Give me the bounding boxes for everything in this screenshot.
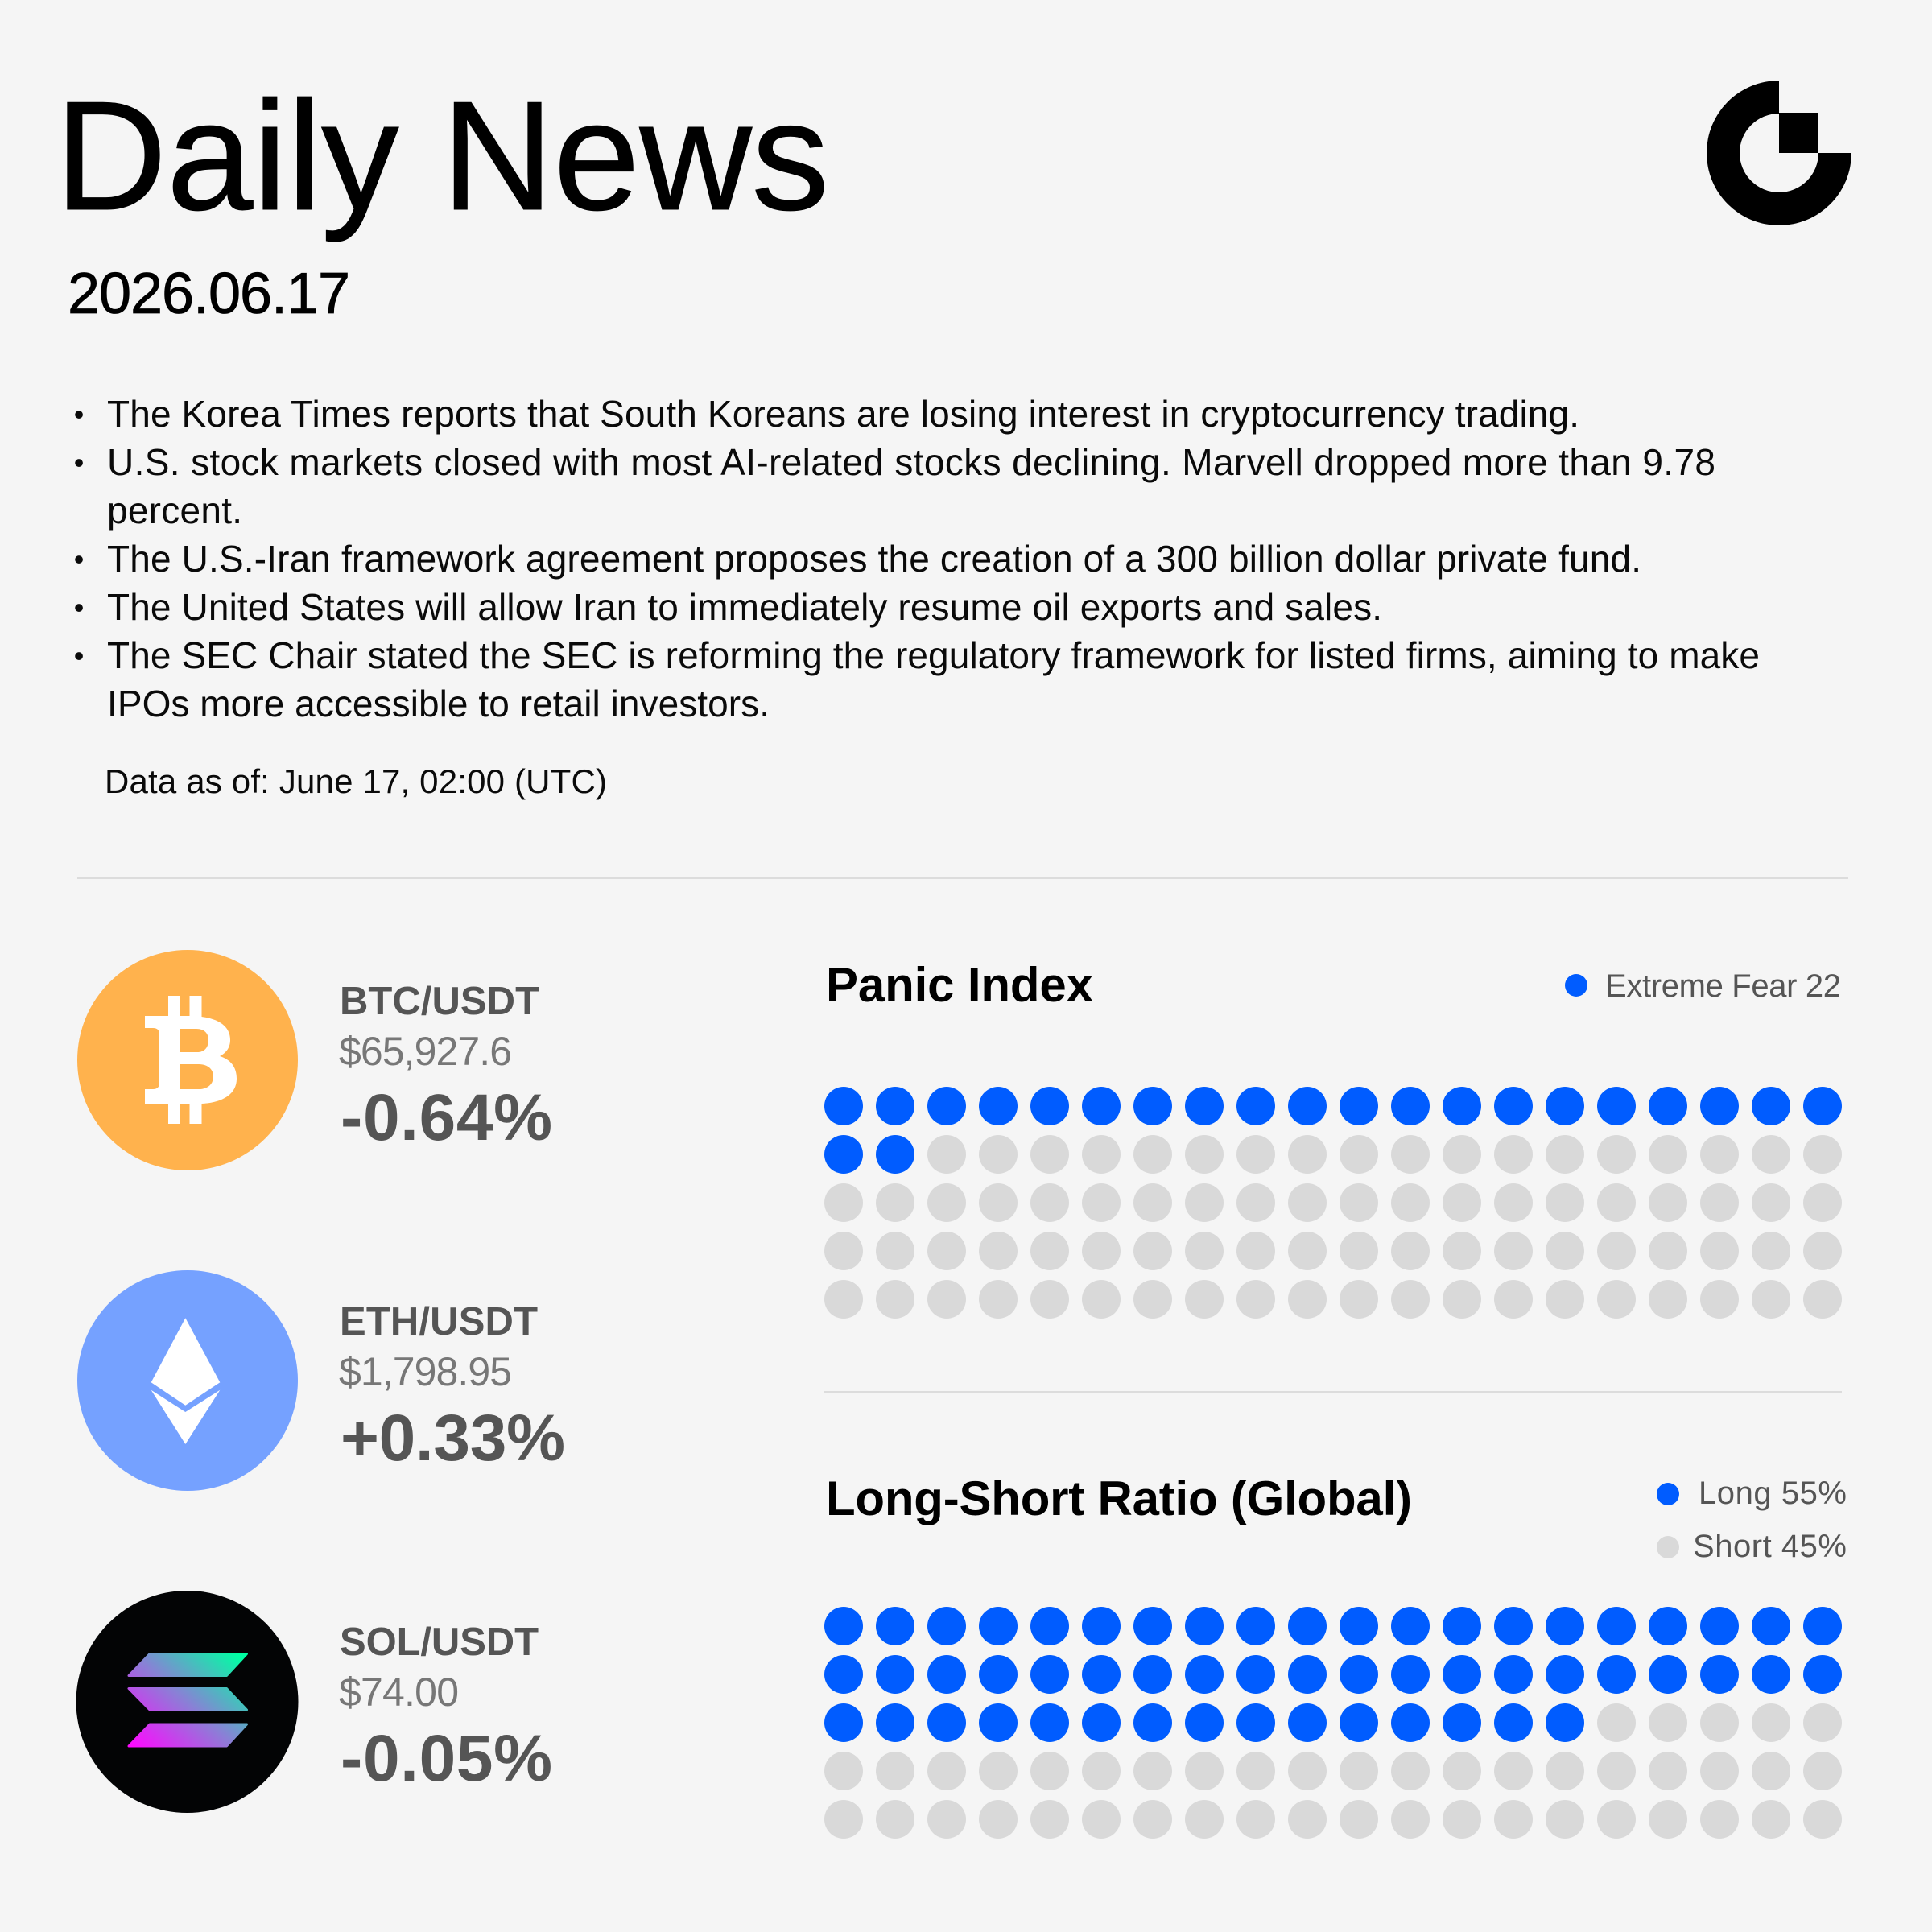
news bullet list: The United States will allow Iran to immediately resume oil exports and sales. xyxy=(107,586,1382,628)
icon: brand logo xyxy=(1707,80,1852,225)
legend: extreme fear: Extreme Fear 22 xyxy=(1605,968,1841,1004)
news bullet list: percent. xyxy=(107,489,242,531)
ETH price block: +0.33% xyxy=(341,1402,565,1475)
news bullet list: IPOs more accessible to retail investors. xyxy=(107,683,770,724)
news bullet list: • xyxy=(74,398,84,431)
news bullet list: • xyxy=(74,639,84,672)
ETH price block: $1,798.95 xyxy=(339,1349,512,1394)
news bullet list xyxy=(74,393,1760,724)
BTC price block xyxy=(339,980,552,1154)
legend: long: Long 55% xyxy=(1699,1476,1847,1511)
ETH price block xyxy=(339,1300,565,1475)
SOL price block xyxy=(339,1620,552,1795)
SOL price block: -0.05% xyxy=(341,1722,552,1795)
news bullet list: • xyxy=(74,543,84,576)
BTC price block: BTC/USDT xyxy=(340,980,539,1023)
news bullet list: • xyxy=(74,446,84,479)
legend: short: Short 45% xyxy=(1693,1529,1847,1564)
date: 2026.06.17 xyxy=(68,262,350,326)
BTC price block: $65,927.6 xyxy=(339,1029,512,1074)
news bullet list: The Korea Times reports that South Koreans are losing interest in cryptocurrency trading. xyxy=(107,393,1579,435)
SOL price block: $74.00 xyxy=(339,1670,459,1715)
news bullet list: The SEC Chair stated the SEC is reforming the regulatory framework for listed firms, aiming to make xyxy=(107,634,1760,676)
news bullet list: • xyxy=(74,591,84,624)
dot chart: panic index xyxy=(824,1087,1842,1319)
icon: bitcoin xyxy=(77,950,298,1170)
BTC price block: -0.64% xyxy=(341,1081,552,1154)
icon: solana xyxy=(76,1591,298,1813)
dot chart: long-short ratio xyxy=(824,1607,1842,1839)
heading: long-short ratio: Long-Short Ratio (Global) xyxy=(826,1472,1412,1525)
ETH price block: ETH/USDT xyxy=(340,1300,538,1344)
SOL price block: SOL/USDT xyxy=(340,1620,539,1664)
news bullet list: U.S. stock markets closed with most AI-related stocks declining. Marvell dropped more than 9.78 xyxy=(107,441,1715,483)
heading: panic index: Panic Index xyxy=(826,958,1093,1012)
news bullet list: The U.S.-Iran framework agreement proposes the creation of a 300 billion dollar private fund. xyxy=(107,538,1641,580)
icon: ethereum xyxy=(77,1270,298,1491)
data timestamp: Data as of: June 17, 02:00 (UTC) xyxy=(105,762,607,800)
title: Daily News xyxy=(55,68,829,242)
